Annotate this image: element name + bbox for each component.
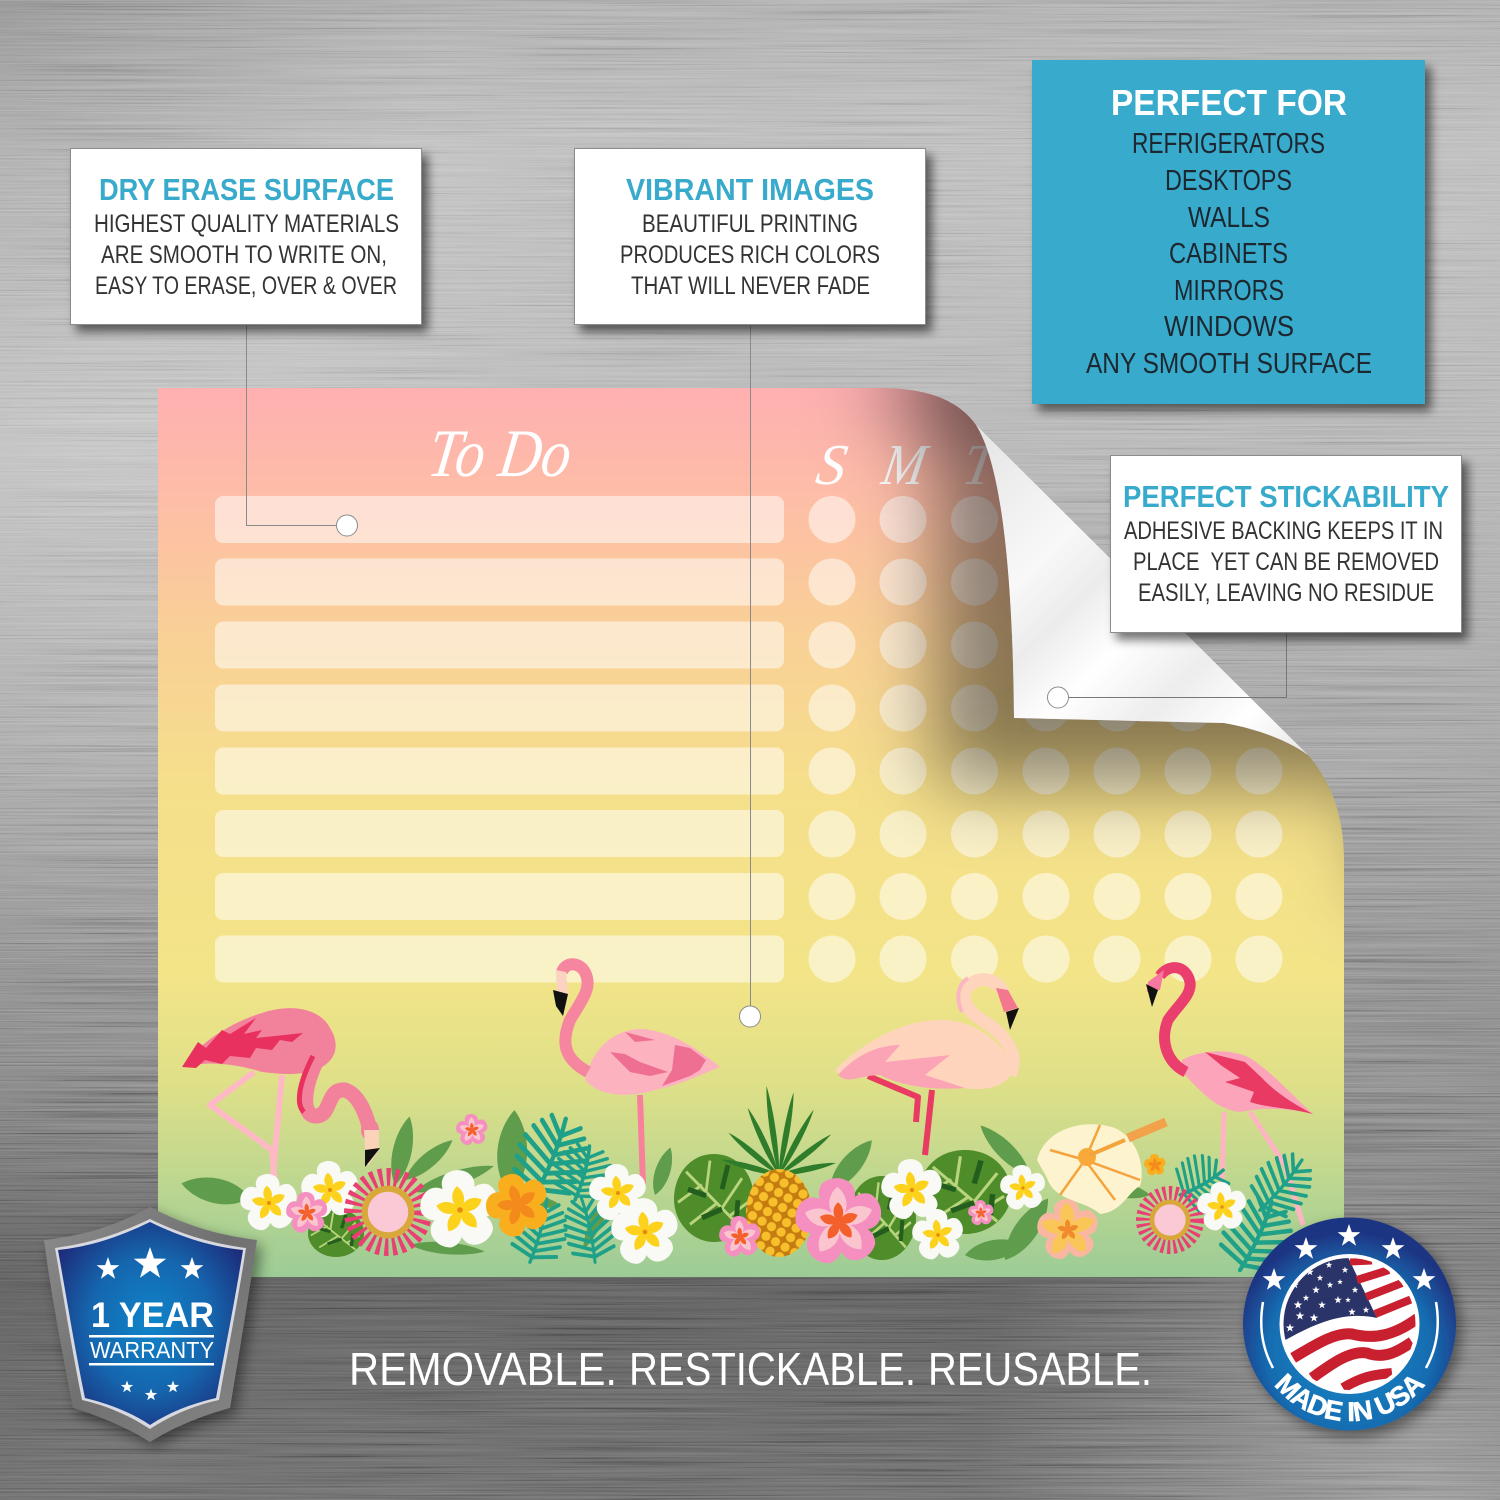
- callout heading: VIBRANT IMAGES: [626, 172, 874, 207]
- hibiscus flower: [1037, 1122, 1166, 1214]
- surface list: WALLS: [1188, 202, 1270, 234]
- leader line: stickability: [1048, 634, 1286, 708]
- tagline: REMOVABLE.: [349, 1343, 617, 1395]
- callout body: EASILY, LEAVING NO RESIDUE: [1138, 579, 1434, 607]
- panel: chore chart magnetic sheet: [158, 388, 1344, 1277]
- surface list: DESKTOPS: [1165, 165, 1292, 197]
- callout body: HIGHEST QUALITY MATERIALS: [94, 210, 399, 238]
- callout body: ARE SMOOTH TO WRITE ON,: [101, 241, 387, 269]
- to do rows: [215, 496, 784, 982]
- day labels: M: [877, 432, 934, 497]
- tropical plants: leaves and palms: [179, 1107, 1323, 1285]
- flamingo 1: head down: [182, 1008, 380, 1185]
- callout body: THAT WILL NEVER FADE: [631, 272, 870, 300]
- callout: dry erase surface: [70, 148, 422, 324]
- stars: [97, 1247, 203, 1400]
- day labels: S: [812, 432, 852, 497]
- leader line: vibrant images: [740, 326, 760, 1027]
- peeled corner: white backing: [976, 425, 1308, 755]
- ring stars: [1263, 1224, 1435, 1290]
- callout body: PRODUCES RICH COLORS: [620, 241, 880, 269]
- surface list: ANY SMOOTH SURFACE: [1086, 348, 1372, 380]
- panel: perfect for: [1032, 60, 1425, 404]
- tagline: [349, 1343, 1152, 1395]
- callout: vibrant images: [574, 148, 926, 324]
- day labels: T: [958, 432, 1005, 497]
- plumeria and protea blooms: [237, 1114, 1249, 1269]
- pineapple: [720, 1085, 836, 1257]
- surface list: CABINETS: [1169, 238, 1288, 270]
- callout body: [620, 210, 880, 300]
- flamingo 2: standing center-left: [553, 964, 720, 1185]
- callout heading: DRY ERASE SURFACE: [99, 172, 394, 207]
- callout body: BEAUTIFUL PRINTING: [642, 210, 858, 238]
- american flag: [1284, 1258, 1416, 1390]
- day labels: [815, 446, 988, 485]
- callout body: [1124, 517, 1443, 607]
- flamingo 3: pale, one leg raised: [835, 978, 1019, 1155]
- panel heading: PERFECT FOR: [1111, 82, 1347, 123]
- tagline: REUSABLE.: [928, 1343, 1152, 1395]
- callout body: EASY TO ERASE, OVER & OVER: [95, 272, 397, 300]
- callout body: PLACE YET CAN BE REMOVED: [1133, 548, 1439, 576]
- callout: perfect stickability: [1110, 456, 1462, 632]
- callout body: [94, 210, 399, 300]
- warranty text: [89, 1296, 214, 1366]
- surface list: WINDOWS: [1164, 311, 1294, 343]
- surface list: [1086, 128, 1372, 380]
- warranty text: WARRANTY: [90, 1337, 214, 1363]
- badge: 1 year warranty shield: [44, 1207, 257, 1442]
- heading: To Do: To Do: [424, 415, 577, 491]
- curl shadow on sheet: [841, 388, 1344, 916]
- warranty text: 1 YEAR: [91, 1296, 214, 1335]
- weekly check circles: [808, 496, 1282, 982]
- flamingo 4: standing right: [1146, 968, 1313, 1225]
- made in USA text: MADE IN USA: [1274, 1372, 1426, 1422]
- surface list: REFRIGERATORS: [1132, 128, 1325, 160]
- badge: made in USA: [1241, 1216, 1468, 1444]
- tagline: RESTICKABLE.: [629, 1343, 916, 1395]
- leader line: dry erase: [246, 326, 358, 536]
- surface list: MIRRORS: [1174, 275, 1284, 307]
- callout heading: PERFECT STICKABILITY: [1123, 479, 1449, 514]
